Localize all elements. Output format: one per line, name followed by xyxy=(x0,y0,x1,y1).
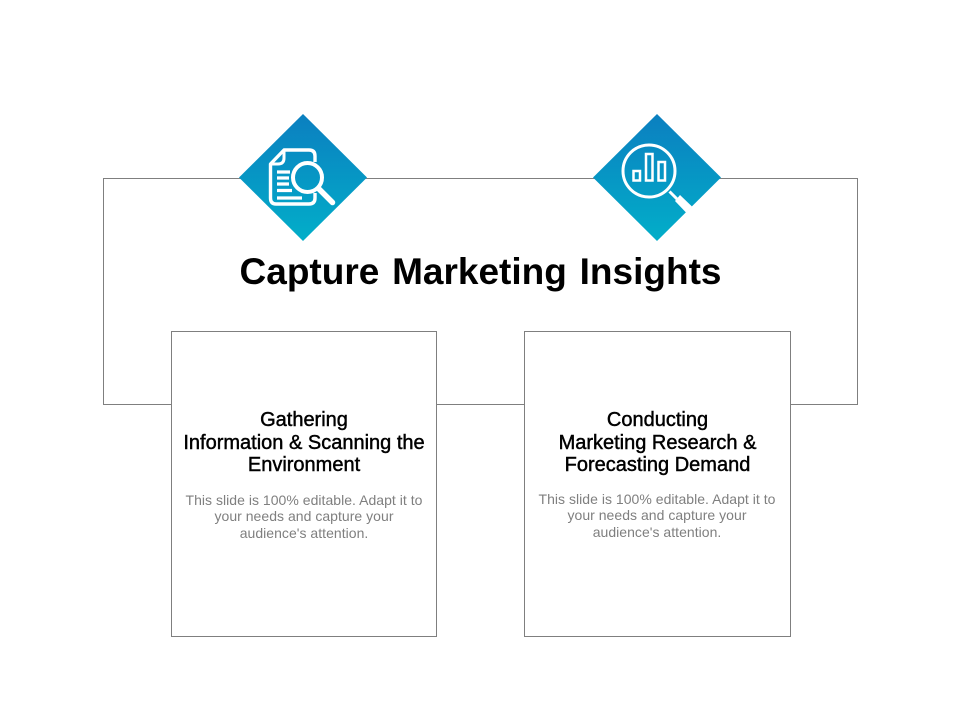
left card body text: your needs and capture your xyxy=(214,508,394,524)
title: Capture Marketing Insights xyxy=(240,251,721,292)
right card body text: This slide is 100% editable. Adapt it to xyxy=(538,490,776,506)
right card heading: Forecasting Demand xyxy=(565,454,750,476)
left card heading: Environment xyxy=(248,454,360,476)
right card body text: audience's attention. xyxy=(593,524,721,540)
connector frame xyxy=(104,178,858,404)
left card body text: This slide is 100% editable. Adapt it to xyxy=(185,492,422,508)
icon: bar chart magnifier in diamond xyxy=(593,114,721,241)
left card heading: Gathering xyxy=(260,409,348,431)
panel: right card xyxy=(524,332,790,636)
panel: left card xyxy=(172,332,436,636)
right card heading xyxy=(559,409,756,476)
right card body text xyxy=(538,490,776,540)
right card body text: your needs and capture your xyxy=(567,507,747,523)
right card heading: Marketing Research & xyxy=(559,432,756,454)
left card heading xyxy=(183,409,425,476)
icon: document with magnifier in diamond xyxy=(239,114,367,241)
left card body text xyxy=(185,492,422,541)
left card body text: audience's attention. xyxy=(240,525,368,541)
left card heading: Information & Scanning the xyxy=(183,432,425,454)
right card heading: Conducting xyxy=(607,409,708,431)
